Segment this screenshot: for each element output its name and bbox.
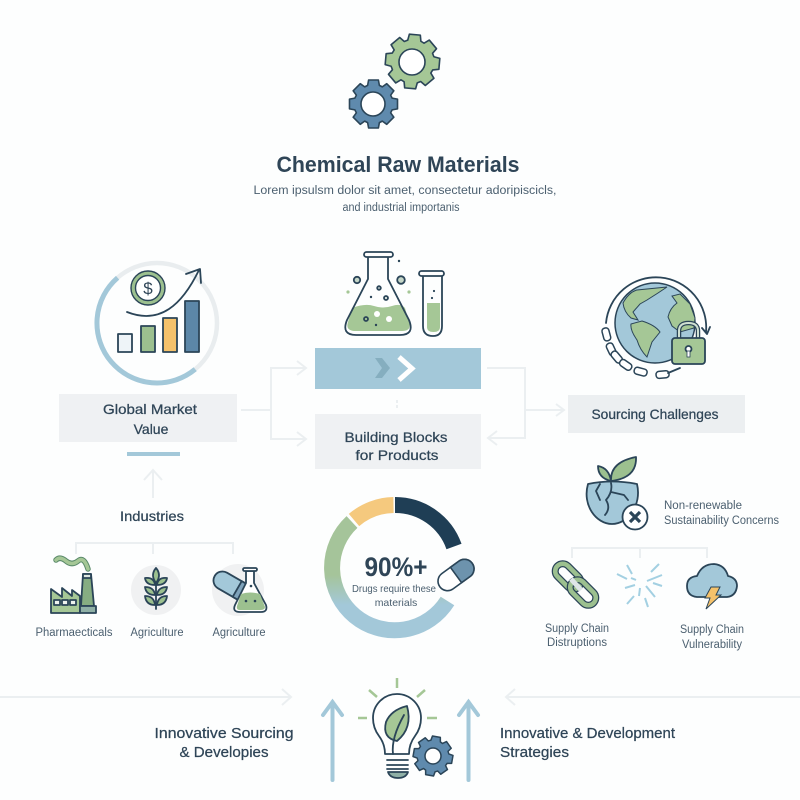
icon: wheat bbox=[131, 565, 181, 615]
icon: chain link bbox=[552, 561, 599, 608]
panel: building blocks bbox=[315, 414, 481, 469]
text: innovative sourcing bbox=[154, 726, 294, 761]
icon: factory bbox=[51, 558, 96, 613]
icon: capsule bbox=[434, 556, 478, 594]
labels: supply chain: Supply Chain bbox=[545, 623, 609, 635]
text: innovative development bbox=[500, 726, 675, 761]
label: sustainability: Sustainability Concerns bbox=[664, 515, 779, 527]
icon: flask and test tube bbox=[345, 252, 444, 336]
labels: industries: Agriculture bbox=[212, 627, 266, 639]
connector: supply chain bracket bbox=[572, 548, 707, 558]
panel: global market value bbox=[59, 394, 237, 442]
arrow: industries to market value bbox=[144, 470, 162, 498]
labels: supply chain bbox=[545, 623, 744, 651]
icon: sparks bbox=[617, 564, 662, 607]
stat: 90%+: Drugs require these bbox=[352, 583, 436, 595]
icon: gears bbox=[349, 32, 442, 128]
arrow: bottom right bbox=[506, 689, 800, 705]
icon: market value chart bbox=[97, 263, 217, 383]
subtitle: Lorem ipsulsm dolor sit amet, consectetur adoripiscicls, bbox=[254, 185, 556, 197]
panel: sourcing challenges bbox=[568, 395, 745, 433]
arrow: bottom left bbox=[0, 689, 291, 705]
panel: blue process bar bbox=[315, 348, 481, 389]
labels: supply chain: Supply Chain bbox=[680, 624, 744, 636]
text: innovative development: Strategies bbox=[500, 745, 569, 761]
text: innovative sourcing: & Developies bbox=[180, 745, 268, 761]
icon: market value chart: $ bbox=[143, 279, 153, 298]
icon: lightbulb with leaf and gear bbox=[358, 678, 456, 779]
labels: industries: Agriculture bbox=[130, 627, 184, 639]
arrow: up left bbox=[323, 702, 342, 780]
icon: globe with lock and chain bbox=[601, 277, 710, 379]
icon: cracked earth with sprout bbox=[587, 457, 648, 530]
connector: market value to centre bbox=[241, 361, 306, 446]
stat: 90%+: 90%+ bbox=[364, 552, 428, 582]
arrow: up right bbox=[459, 702, 478, 780]
panel: building blocks: for Products bbox=[356, 447, 438, 463]
subtitle bbox=[254, 185, 556, 214]
stat: 90%+: materials bbox=[375, 597, 417, 609]
connector: centre to sourcing bbox=[487, 368, 564, 445]
chart: donut 90% bbox=[332, 505, 478, 630]
icon: storm cloud bbox=[687, 564, 737, 609]
panel: global market value: Value bbox=[134, 421, 169, 437]
labels: industries: Pharmaecticals bbox=[36, 627, 113, 639]
panel: global market value: Global Market bbox=[103, 401, 197, 417]
heading: industries: Industries bbox=[120, 508, 184, 524]
labels: supply chain: Distruptions bbox=[547, 637, 607, 649]
text: innovative development: Innovative & Development bbox=[500, 726, 675, 742]
stat: 90%+ bbox=[352, 552, 436, 609]
subtitle: and industrial importanis bbox=[342, 202, 460, 214]
panel: building blocks: Building Blocks bbox=[344, 429, 448, 445]
labels: industries bbox=[36, 627, 266, 639]
title: Chemical Raw Materials bbox=[276, 152, 520, 177]
icon: pill and flask bbox=[210, 564, 266, 616]
label: sustainability bbox=[664, 500, 779, 527]
label: sustainability: Non-renewable bbox=[664, 500, 742, 512]
labels: supply chain: Vulnerability bbox=[682, 639, 742, 651]
panel: sourcing challenges: Sourcing Challenges bbox=[592, 406, 718, 422]
text: innovative sourcing: Innovative Sourcing bbox=[154, 726, 294, 742]
connector: industries bracket bbox=[76, 543, 233, 554]
